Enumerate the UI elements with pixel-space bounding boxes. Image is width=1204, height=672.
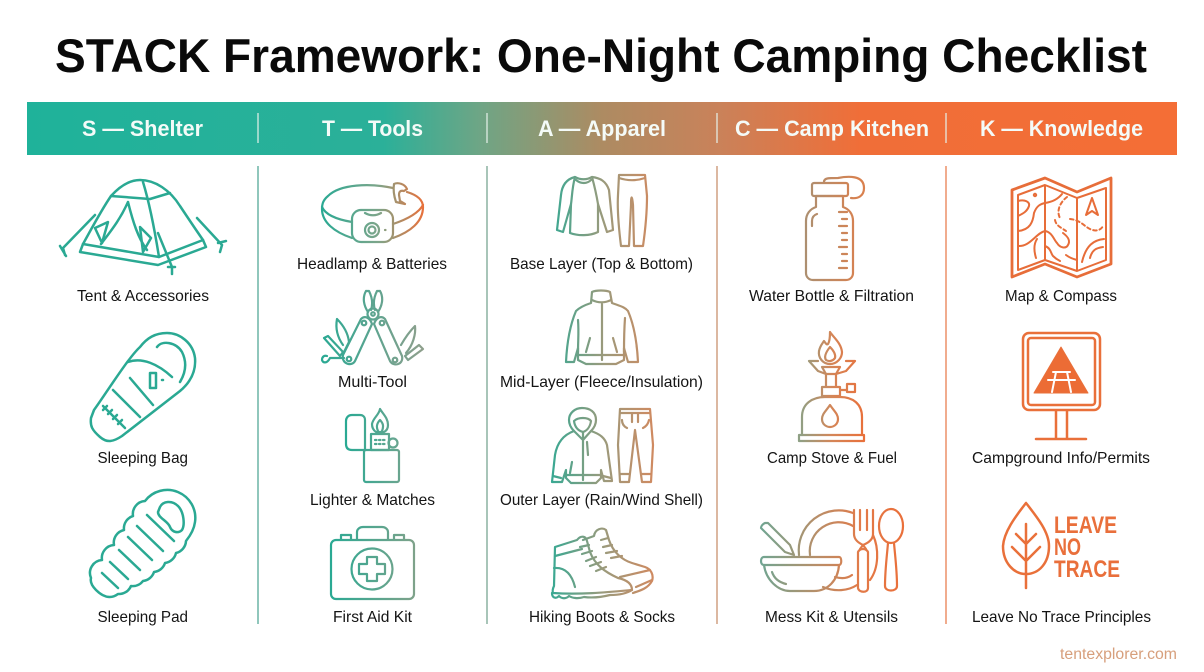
label: campground: Campground Info/Permits [972,450,1150,467]
label: outer layer: Outer Layer (Rain/Wind Shell) [500,492,703,509]
label: leave no trace: Leave No Trace Principles [972,609,1151,626]
icon: mid layer fleece [566,290,638,364]
icon: mess kit [761,509,903,592]
icon: tent [60,180,226,274]
icon: campground sign [1023,333,1100,439]
panel: apparel [500,175,703,626]
icon: first aid kit [331,527,414,599]
icon: headlamp [322,183,423,242]
label: first aid kit: First Aid Kit [333,609,413,626]
heading: S Shelter: S — Shelter [82,116,203,141]
panel: knowledge [972,178,1151,626]
label: lighter: Lighter & Matches [310,492,435,509]
watermark: tentexplorer.com [1060,646,1177,663]
label: hiking boots: Hiking Boots & Socks [529,609,675,626]
label: tent: Tent & Accessories [77,288,209,305]
icon: multi-tool [322,291,423,364]
label: camp stove: Camp Stove & Fuel [767,450,897,467]
label: map: Map & Compass [1005,288,1117,305]
label: base layer: Base Layer (Top & Bottom) [510,256,693,273]
label: sleeping pad: Sleeping Pad [98,609,188,626]
label: mid layer: Mid-Layer (Fleece/Insulation) [500,374,703,391]
label: sleeping bag: Sleeping Bag [98,450,188,467]
icon: leave no trace: NO [1054,534,1081,561]
heading: A Apparel: A — Apparel [538,116,666,141]
icon: leave no trace: TRACE [1054,556,1120,583]
icon: camp stove [799,332,864,441]
title: STACK Framework: One-Night Camping Checklist [55,29,1147,82]
header band [27,102,1177,155]
icon: water bottle [806,177,864,280]
panel: shelter [60,180,226,626]
label: mess kit: Mess Kit & Utensils [765,609,898,626]
icon: leave no trace [1003,503,1120,588]
icon: outer layer shell [552,408,653,483]
heading: C Camp Kitchen: C — Camp Kitchen [735,116,929,141]
icon: map and compass [1012,178,1111,277]
heading: T Tools: T — Tools [322,116,423,141]
icon: sleeping bag [91,333,195,441]
icon: leave no trace: LEAVE [1054,512,1117,539]
heading: K Knowledge: K — Knowledge [980,116,1143,141]
icon: base layer [557,175,647,246]
panel: tools [297,183,447,626]
label: water bottle: Water Bottle & Filtration [749,288,914,305]
icon: sleeping pad [90,490,195,597]
panel: camp kitchen [749,177,914,626]
label: headlamp: Headlamp & Batteries [297,256,447,273]
icon: hiking boots [552,529,653,598]
label: multi-tool: Multi-Tool [338,374,407,391]
icon: lighter [346,409,399,482]
